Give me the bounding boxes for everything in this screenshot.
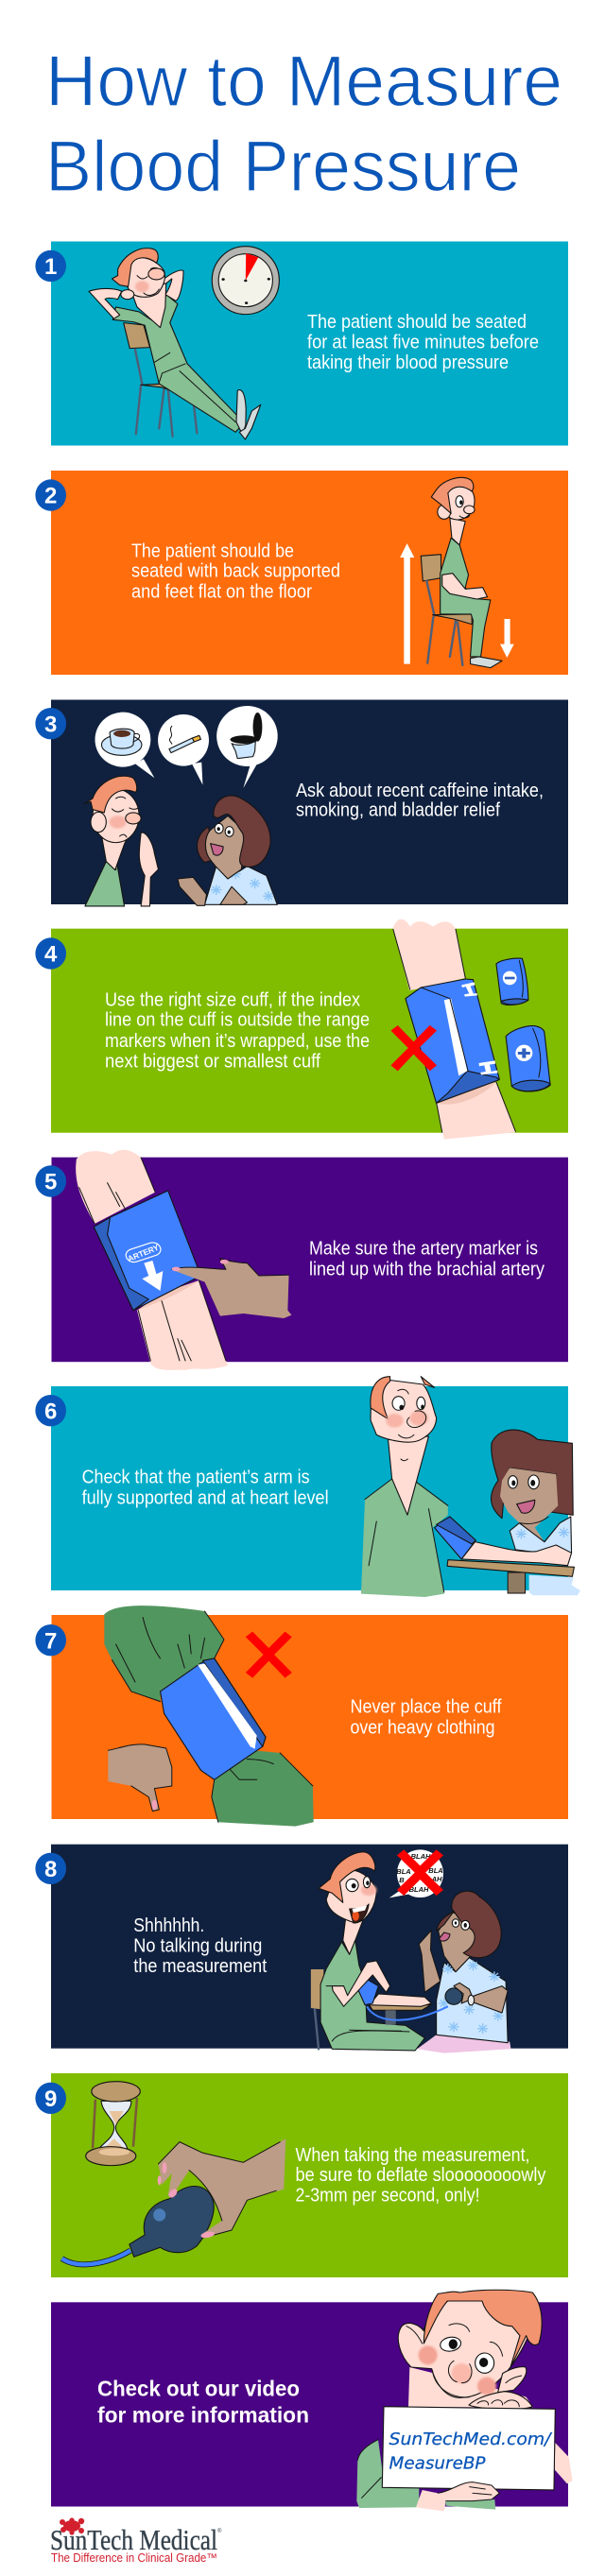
logo tagline: The Difference in Clinical Grade™: [51, 2551, 217, 2565]
logo registered mark: ®: [217, 2528, 222, 2534]
panel 1 text: for at least five minutes before: [307, 331, 539, 353]
step number 2: 2: [44, 484, 57, 509]
ARTERY label on cuff: ARTERY: [127, 1243, 161, 1263]
speech bubble: crossed out blah blah: B: [399, 1876, 405, 1884]
speech bubble: crossed out blah blah: BLAH: [411, 1852, 431, 1861]
arrow: tall up arrow: [400, 543, 414, 664]
panel 7 text: over heavy clothing: [350, 1716, 495, 1739]
logo: SunTech Medical: [50, 2517, 222, 2565]
hand under sign: [416, 2482, 499, 2511]
panel 1 text: taking their blood pressure: [307, 352, 509, 373]
speech bubble: crossed out blah blah: BLA: [428, 1866, 443, 1875]
panel 1 text: The patient should be seated: [307, 311, 527, 333]
panel 4 text: line on the cuff is outside the range: [105, 1009, 370, 1030]
icon: wall clock with red five minute wedge: [212, 247, 279, 315]
speech bubble: coffee: [95, 713, 154, 778]
panel 6 background: [51, 1386, 568, 1590]
illustration: nurse talking: [178, 796, 277, 905]
illustration: talking patient and nurse: [311, 1852, 510, 2053]
panel 4 text: next biggest or smallest cuff: [105, 1051, 320, 1072]
logo wordmark: SunTech Medical: [50, 2523, 217, 2556]
sign with URL: MeasureBP: [389, 2453, 486, 2474]
step number 1: [35, 250, 66, 282]
panel 6: arm at heart level: [35, 1377, 580, 1597]
panel 8 text: Shhhhhh.: [133, 1915, 204, 1936]
panel 6 text: Check that the patient’s arm is: [82, 1467, 310, 1487]
panel 3 background: [51, 699, 568, 904]
panel 7 text: Never place the cuff: [350, 1695, 502, 1718]
panel 5 text: Make sure the artery marker is: [309, 1238, 538, 1259]
panel 3 text: Ask about recent caffeine intake,: [296, 780, 544, 801]
call to action text: Check out our video: [97, 2376, 300, 2400]
illustration: hand squeezing inflation bulb: [61, 2138, 285, 2264]
step number 5: 5: [44, 1170, 57, 1195]
icon: red logo splat: [60, 2517, 84, 2535]
panel 10: video call to action: [51, 2290, 573, 2511]
speech bubble: crossed out blah blah: AH: [431, 1875, 442, 1883]
panel 8 text: the measurement: [133, 1955, 268, 1977]
illustration: arm with cuff and artery marker: [76, 1150, 228, 1370]
title: Blood Pressure: [45, 127, 521, 207]
panel 6 text: fully supported and at heart level: [82, 1487, 329, 1508]
icon: small cuff with minus: [496, 958, 528, 1005]
panel 5 background: [51, 1158, 568, 1362]
panel 5: artery marker: [35, 1150, 568, 1370]
speech bubble: toilet: [216, 706, 278, 788]
step number 4: [35, 937, 66, 970]
panel 9 text: When taking the measurement,: [295, 2144, 529, 2166]
step number 4: 4: [44, 942, 58, 968]
step number 9: [35, 2083, 66, 2114]
speech bubble: crossed out blah blah: BLAH: [409, 1885, 429, 1894]
sign with URL: SunTechMed.com/: [389, 2430, 553, 2449]
step number 6: 6: [44, 1399, 57, 1424]
panel 10 background: [51, 2302, 568, 2506]
panel 9 background: [51, 2073, 568, 2277]
panel 8: no talking: [35, 1845, 568, 2053]
illustration: man holding sign: [356, 2290, 573, 2510]
sign with URL: [382, 2407, 555, 2490]
step number 3: 3: [44, 712, 57, 737]
icon: thumbs down hand: [108, 1744, 172, 1812]
speech bubble: crossed out blah blah: BLA: [396, 1867, 411, 1876]
panel 4 background: [51, 929, 568, 1133]
panel 2 text: and feet flat on the floor: [131, 580, 312, 603]
panel 4 text: markers when it’s wrapped, use the: [105, 1030, 370, 1052]
icon: hourglass: [86, 2082, 140, 2166]
step number 9: 9: [44, 2087, 57, 2112]
icon: red X: [246, 1632, 292, 1678]
step number 8: 8: [44, 1857, 57, 1882]
panel 8 background: [51, 1845, 568, 2049]
panel 5 text: lined up with the brachial artery: [309, 1259, 545, 1279]
illustration: man relaxing on chair: [89, 249, 261, 439]
panel 7 background: [51, 1615, 568, 1819]
illustration: man sitting upright on chair: [421, 477, 502, 668]
title: How to Measure: [45, 42, 562, 122]
illustration: pointing hand: [172, 1259, 291, 1318]
step number 7: 7: [44, 1628, 57, 1654]
step number 8: [35, 1853, 66, 1884]
panel 2 text: seated with back supported: [131, 559, 340, 582]
speech bubble: cigarette: [158, 714, 209, 785]
panel 2 background: [51, 471, 568, 675]
panel 2 text: The patient should be: [131, 541, 294, 561]
panel 4: right size cuff: [35, 919, 568, 1140]
icon: red X: [390, 1025, 437, 1071]
illustration: arm with wrong-size cuff: [393, 919, 515, 1140]
speech bubble: crossed out blah blah: [389, 1849, 443, 1898]
panel 7: no heavy clothing: [35, 1606, 568, 1827]
call to action text: for more information: [97, 2402, 309, 2427]
icon: large cuff with plus: [506, 1026, 550, 1091]
step number 7: [35, 1624, 66, 1656]
illustration: man declining with raised hand: [84, 776, 158, 906]
panel 1 background: [51, 242, 568, 446]
panel 9: deflate slowly: [35, 2073, 568, 2277]
panel 9 text: be sure to deflate sloooooooowly: [295, 2164, 546, 2186]
arrow: short down arrow: [500, 619, 514, 658]
title: [45, 42, 562, 207]
panel 8 text: No talking during: [133, 1935, 262, 1956]
panel 4 text: Use the right size cuff, if the index: [105, 988, 361, 1011]
illustration: cuff over heavy sleeve: [104, 1606, 314, 1827]
panel 3: caffeine, smoking, bladder: [35, 699, 568, 906]
panel 2: back supported, feet flat: [35, 471, 568, 675]
panel 1: seated for five minutes: [35, 242, 568, 446]
step number 2: [35, 479, 66, 511]
panel 9 text: 2-3mm per second, only!: [295, 2185, 480, 2206]
step number 6: [35, 1395, 66, 1426]
step number 5: [35, 1165, 66, 1197]
step number 1: 1: [44, 254, 57, 280]
illustration: patient with arm on table: [361, 1377, 580, 1597]
panel 3 text: smoking, and bladder relief: [296, 799, 500, 820]
step number 3: [35, 708, 66, 739]
